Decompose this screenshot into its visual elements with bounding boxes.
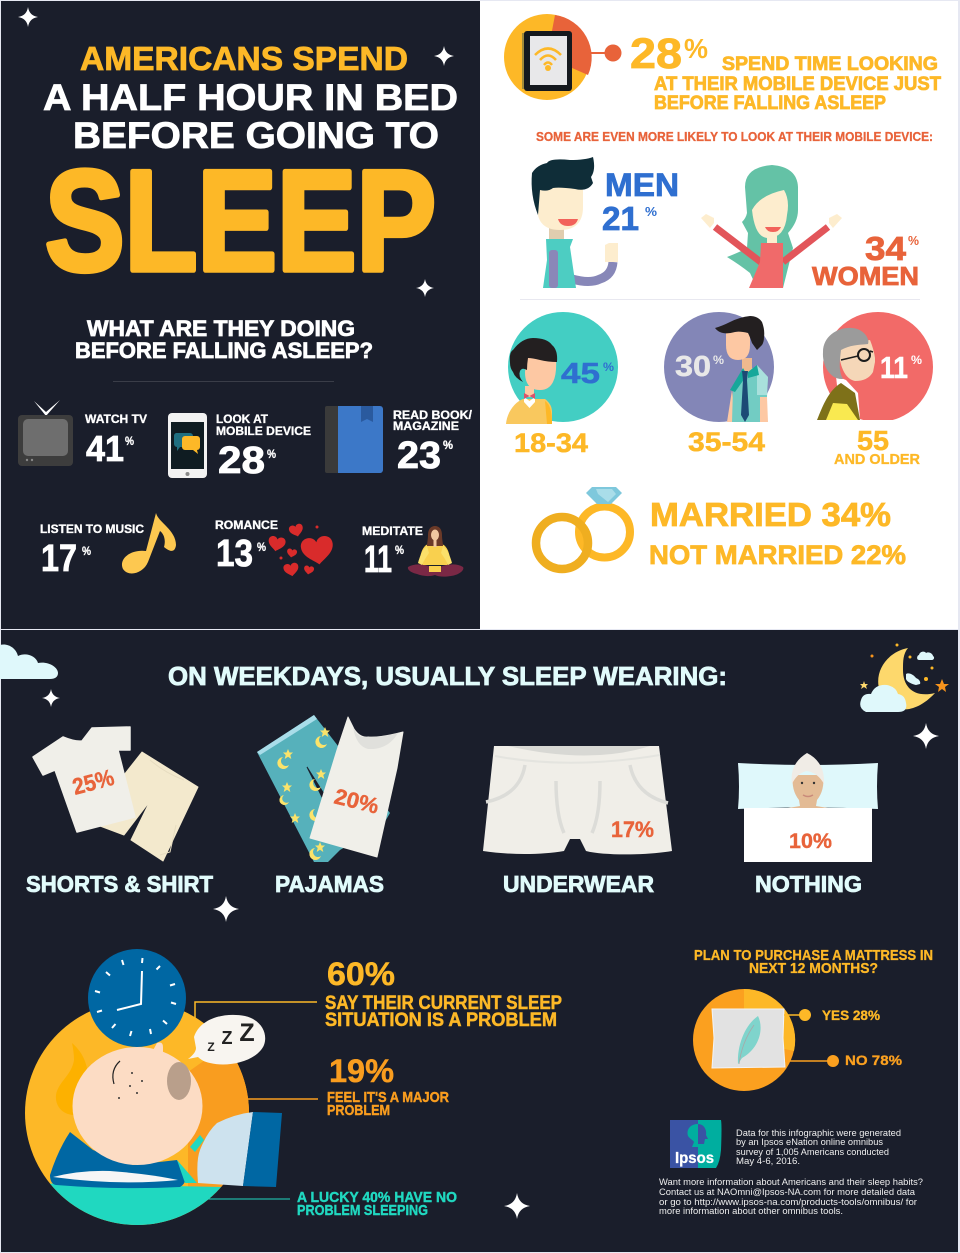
icon: smartphone xyxy=(168,413,207,478)
panel: bottom, sleepwear and sleep problems xyxy=(0,630,958,1252)
activity: listen to music: 17 xyxy=(41,538,77,580)
callout: 60 percent: SAY THEIR CURRENT SLEEP xyxy=(325,993,562,1014)
pie chart: mattress purchase: YES 28% xyxy=(822,1007,881,1023)
callout: 19 percent: FEEL IT'S A MAJOR xyxy=(327,1090,449,1106)
contact note: or go to http://www.ipsos-na.com/products-tools/omnibus/ for xyxy=(659,1197,917,1208)
icon: moon and clouds xyxy=(860,644,949,712)
callout: 60 percent xyxy=(195,956,562,1031)
activity: watch TV xyxy=(18,400,147,469)
activity: mobile device: LOOK AT xyxy=(216,414,268,426)
sleepwear: nothing xyxy=(738,753,878,897)
icon: sparkle xyxy=(42,689,60,707)
icon: television xyxy=(18,400,73,466)
age group: 35-54 xyxy=(664,312,774,457)
age group: 35-54: % xyxy=(713,353,724,367)
callout: 40 percent xyxy=(207,1190,457,1219)
callout: 19 percent: 19% xyxy=(329,1053,394,1089)
subheading: BEFORE FALLING ASLEEP? xyxy=(75,338,373,363)
activity: watch TV: % xyxy=(125,434,134,448)
icon: cloud xyxy=(0,645,58,679)
icon: sparkle xyxy=(434,46,454,66)
speech bubble: snoring: Z xyxy=(207,1040,215,1054)
panel: right, mobile device usage xyxy=(480,1,958,629)
icon: sparkle xyxy=(416,279,434,297)
activity: romance xyxy=(215,520,335,577)
contact note xyxy=(659,1177,923,1217)
stat: 28 percent: BEFORE FALLING ASLEEP xyxy=(654,92,886,114)
activity: romance: 13 xyxy=(216,533,253,575)
icon: meditating woman xyxy=(408,526,463,577)
title xyxy=(43,40,458,301)
contact note: more information about other omnibus tools. xyxy=(659,1206,843,1217)
activity: meditate: % xyxy=(395,543,404,557)
sleepwear: underwear: 17% xyxy=(611,817,654,842)
activity: romance: % xyxy=(257,540,266,554)
age group: 55 and older: AND OLDER xyxy=(834,451,920,468)
heading: ON WEEKDAYS, USUALLY SLEEP WEARING: xyxy=(168,661,727,691)
icon: book xyxy=(325,406,383,473)
icon: clock xyxy=(88,949,186,1047)
activity: listen to music xyxy=(40,513,176,580)
activity: meditate xyxy=(362,526,463,581)
pie chart: mattress purchase xyxy=(693,989,903,1091)
activity: listen to music: % xyxy=(82,544,91,558)
activity: meditate: 11 xyxy=(364,539,392,581)
label: women: WOMEN xyxy=(812,261,919,291)
callout: 19 percent: PROBLEM xyxy=(327,1103,390,1119)
illustration: man xyxy=(532,157,618,288)
label: men xyxy=(602,167,679,237)
activity: romance: ROMANCE xyxy=(215,520,278,532)
source note: by an Ipsos eNation online omnibus xyxy=(736,1137,883,1148)
logo: Ipsos: Ipsos xyxy=(675,1150,714,1167)
activity: mobile device: 28 xyxy=(218,440,265,482)
activity: read book xyxy=(325,406,473,477)
illustration: sleeping man with clock xyxy=(20,949,282,1230)
label: women xyxy=(812,230,919,291)
age group: 18-34: % xyxy=(603,360,614,374)
activity: read book: % xyxy=(443,438,453,452)
label: men: 21 xyxy=(602,200,639,237)
callout: 60 percent: SITUATION IS A PROBLEM xyxy=(325,1010,557,1031)
mattress question heading: PLAN TO PURCHASE A MATTRESS IN xyxy=(694,948,933,964)
icon: wedding rings xyxy=(536,487,630,569)
label: women: % xyxy=(908,233,919,248)
sleepwear: nothing: 10% xyxy=(789,830,832,853)
icon: sparkle xyxy=(18,7,38,27)
illustration: woman xyxy=(701,165,842,288)
pie with tablet icon xyxy=(504,14,622,100)
title: AMERICANS SPEND xyxy=(80,40,408,77)
mattress question heading: NEXT 12 MONTHS? xyxy=(749,961,878,977)
marital status stats: NOT MARRIED 22% xyxy=(649,540,906,570)
subheading: SOME ARE EVEN MORE LIKELY TO LOOK AT THEIR MOBILE DEVICE: xyxy=(536,129,933,144)
stat: 28 percent: % xyxy=(684,33,708,64)
speech bubble: snoring: Z xyxy=(222,1028,232,1048)
stat: 28 percent: SPEND TIME LOOKING xyxy=(722,53,938,75)
label: men: % xyxy=(645,204,657,219)
age group: 18-34 xyxy=(506,312,618,458)
title: BEFORE GOING TO xyxy=(73,115,439,156)
callout: 40 percent: PROBLEM SLEEPING xyxy=(297,1203,428,1219)
marital status stats: MARRIED 34% xyxy=(650,496,891,533)
marital status stats xyxy=(649,496,906,570)
activity: listen to music: LISTEN TO MUSIC xyxy=(40,524,144,536)
activity: mobile device: % xyxy=(267,447,276,461)
source note: Data for this infographic were generated xyxy=(736,1128,901,1139)
activity: watch TV: 41 xyxy=(86,428,124,469)
logo: Ipsos xyxy=(670,1120,722,1168)
icon: sparkle xyxy=(213,896,239,922)
age group: 55 and older: 11 xyxy=(880,350,908,385)
stat: 28 percent xyxy=(630,30,941,114)
stat: 28 percent: 28 xyxy=(630,30,682,78)
sleepwear: shorts and shirt: 25% xyxy=(70,764,117,800)
icon: sparkle xyxy=(504,1193,530,1219)
label: women: 34 xyxy=(865,230,907,267)
icon: music note xyxy=(122,513,176,573)
sleepwear: shorts and shirt: SHORTS & SHIRT xyxy=(26,871,213,897)
age group: 18-34: 18-34 xyxy=(514,428,588,458)
sleepwear: pajamas: 20% xyxy=(332,784,382,819)
mattress question heading xyxy=(694,948,933,977)
icon: sparkle xyxy=(913,723,939,749)
activity: mobile device: MOBILE DEVICE xyxy=(216,426,311,438)
age group: 55 and older: % xyxy=(911,353,922,367)
speech bubble: snoring: Z xyxy=(239,1019,255,1047)
callout: 40 percent: A LUCKY 40% HAVE NO xyxy=(297,1190,457,1206)
title: A HALF HOUR IN BED xyxy=(43,77,458,118)
sleepwear: shorts and shirt xyxy=(26,727,213,897)
icon: hearts xyxy=(267,523,335,577)
sleepwear: nothing: NOTHING xyxy=(755,871,862,897)
pie chart: mattress purchase: NO 78% xyxy=(845,1052,903,1068)
activity: meditate: MEDITATE xyxy=(362,526,423,538)
source note: May 4-6, 2016. xyxy=(736,1156,800,1167)
title: SLEEP xyxy=(45,142,436,301)
source note xyxy=(736,1128,901,1167)
age group: 55 and older: 55 xyxy=(857,425,889,456)
callout: 60 percent: 60% xyxy=(327,956,395,992)
callout: 19 percent xyxy=(247,1053,449,1119)
age group: 18-34: 45 xyxy=(561,358,600,390)
age group: 55 and older xyxy=(817,312,933,468)
source note: survey of 1,005 Americans conducted xyxy=(736,1147,889,1158)
panel: left, what people do before sleep xyxy=(1,1,480,629)
sleepwear: underwear: UNDERWEAR xyxy=(503,871,654,897)
contact note: Contact us at NAOmni@Ipsos-NA.com for more detailed data xyxy=(659,1187,916,1198)
subheading: WHAT ARE THEY DOING xyxy=(87,316,355,341)
activity: mobile device xyxy=(168,413,311,482)
age group: 35-54: 30 xyxy=(675,351,711,383)
label: men: MEN xyxy=(605,167,679,203)
sleepwear: pajamas xyxy=(257,715,403,897)
stat: 28 percent: AT THEIR MOBILE DEVICE JUST xyxy=(654,73,941,95)
activity: read book: MAGAZINE xyxy=(393,421,459,433)
activity: read book: READ BOOK/ xyxy=(393,410,473,422)
age group: 35-54: 35-54 xyxy=(688,427,765,457)
speech bubble: snoring xyxy=(188,1015,265,1064)
sleepwear: pajamas: PAJAMAS xyxy=(275,871,384,897)
contact note: Want more information about Americans and their sleep habits? xyxy=(659,1177,923,1188)
subheading xyxy=(75,316,373,363)
activity: watch TV: WATCH TV xyxy=(85,414,147,426)
sleepwear: underwear xyxy=(483,746,672,897)
activity: read book: 23 xyxy=(397,435,441,477)
